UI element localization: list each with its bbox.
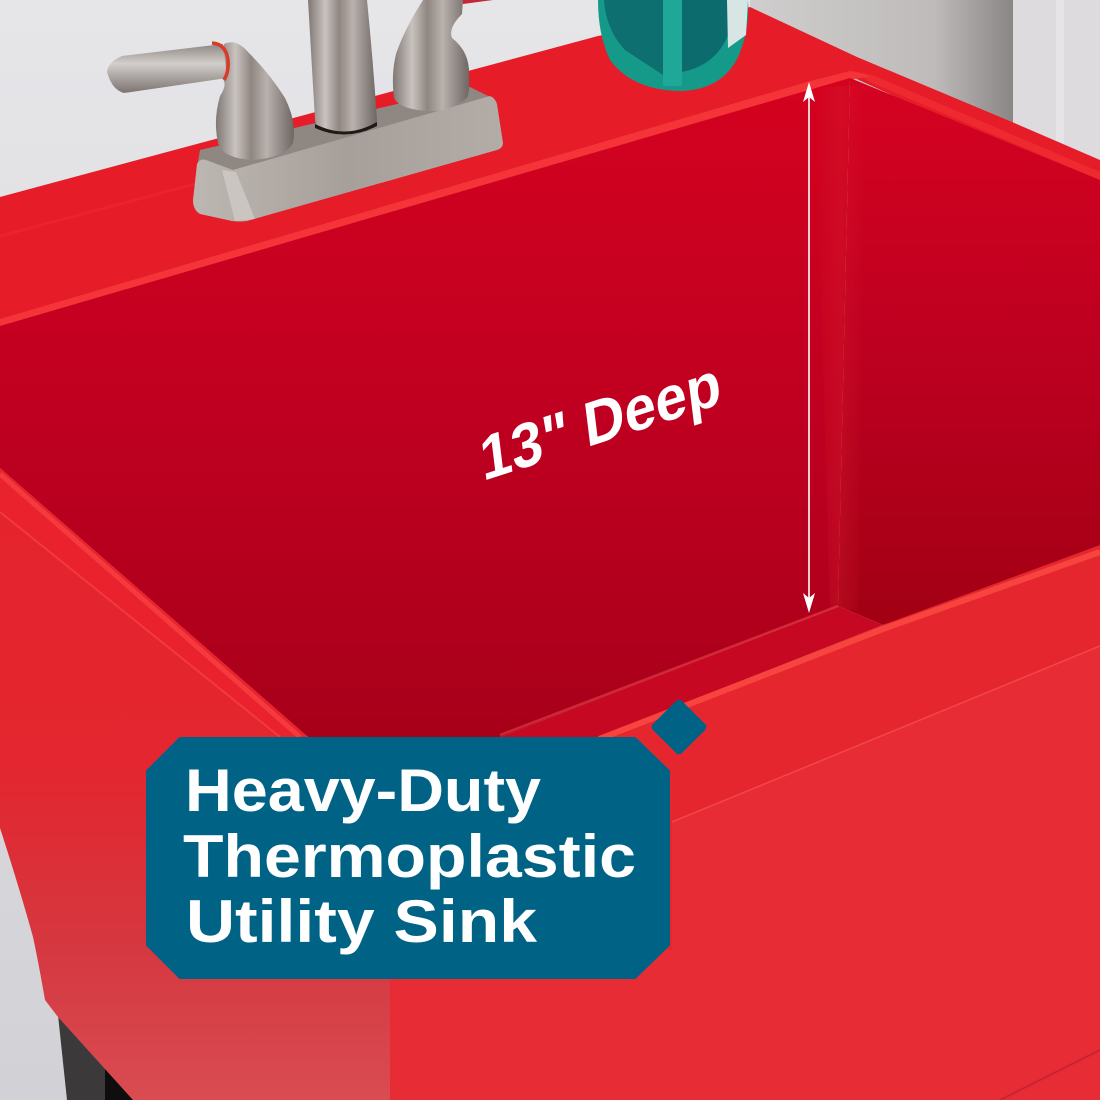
label badge — [147, 698, 708, 978]
badge underlay — [300, 737, 700, 990]
badge title — [183, 757, 636, 955]
soap bottle — [598, 0, 748, 91]
right wall of basin — [838, 78, 1100, 625]
left handle — [107, 42, 294, 160]
corner highlight — [815, 85, 865, 610]
badge background — [147, 738, 669, 978]
faucet — [107, 0, 503, 222]
faucet spout — [308, 0, 377, 135]
basin floor — [500, 606, 883, 737]
sink left panel — [0, 468, 390, 1100]
sink front panel — [388, 646, 1100, 1100]
faucet deck plate — [193, 87, 503, 222]
badge diamond — [650, 698, 708, 756]
right handle — [393, 0, 493, 111]
depth label: 13" Deep — [476, 348, 724, 495]
badge title: Heavy-Duty — [185, 757, 542, 824]
badge title: Utility Sink — [186, 888, 538, 955]
sink basin interior — [0, 78, 1100, 737]
back wall of basin — [0, 78, 850, 737]
sink rim top surface — [0, 7, 1100, 328]
sink leg — [58, 1015, 135, 1100]
depth arrow — [803, 82, 815, 613]
badge title: Thermoplastic — [183, 823, 636, 890]
sink front rim — [599, 545, 1100, 822]
